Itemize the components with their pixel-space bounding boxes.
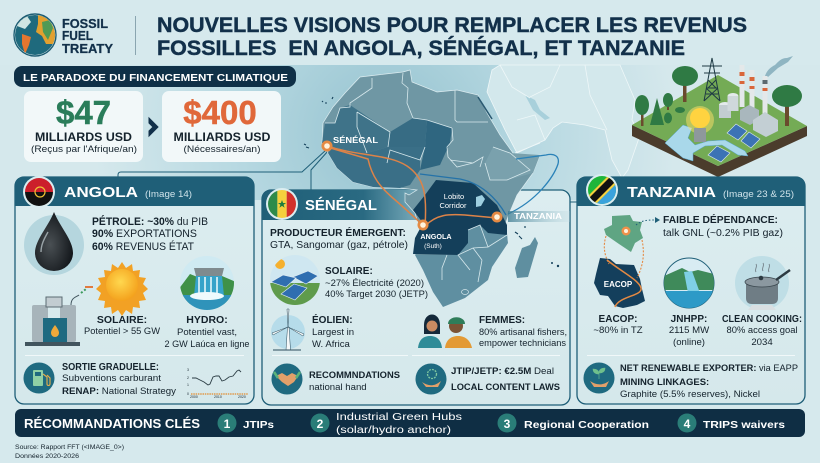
text: JTIP/JETP bbox=[451, 366, 560, 393]
text: EACOP: EACOP: bbox=[599, 314, 637, 325]
text: solaire: 40% Target 2030 (JETP) bbox=[325, 289, 428, 300]
icon: women bbox=[418, 314, 472, 348]
text: hydro: 2 GW Laúca en ligne bbox=[164, 339, 250, 350]
heading: Tanzania: TANZANIA bbox=[627, 184, 716, 201]
text: solaire: SOLAIRE: bbox=[97, 314, 147, 326]
recommendation 3: 3 bbox=[504, 417, 511, 431]
text: clean cooking: CLEAN COOKING: bbox=[722, 314, 802, 325]
text: clean cooking: 2034 bbox=[751, 337, 773, 348]
text: solaire: Potentiel > 55 GW bbox=[84, 326, 161, 337]
smoke bbox=[765, 56, 793, 77]
icon: handshake bbox=[272, 364, 302, 394]
text: clean cooking: 80% access goal bbox=[726, 325, 798, 336]
text: éolien: Largest in bbox=[312, 327, 354, 338]
title: NOUVELLES VISIONS POUR REMPLACER LES REVENUS bbox=[157, 14, 747, 37]
panel: Sénégal bbox=[262, 190, 570, 405]
text: producteur émergent: GTA, Sangomar (gaz, pétrole) bbox=[270, 240, 408, 251]
text: sortie graduelle: Subventions carburant bbox=[62, 373, 161, 384]
panel: Tanzania bbox=[577, 174, 805, 404]
logo: Fossil Fuel Treaty bbox=[14, 14, 56, 56]
map label: Lobito Corridor: Lobito bbox=[444, 192, 464, 201]
chimneys and factory bbox=[719, 65, 778, 137]
map: central corridor dark region bbox=[413, 180, 507, 255]
map label: Angola: (Suth) bbox=[424, 243, 442, 250]
heading: Sénégal: SÉNÉGAL bbox=[305, 197, 377, 214]
card: $47: $47 bbox=[56, 94, 111, 131]
text: JNHPP: 2115 MW bbox=[669, 325, 710, 336]
map label: Lobito Corridor: Corridor bbox=[439, 201, 467, 210]
logo wordmark: FOSSIL bbox=[62, 17, 108, 31]
map label: Angola bbox=[420, 232, 452, 250]
recommendations bar bbox=[15, 409, 805, 437]
icon: hydro dam bbox=[180, 256, 234, 310]
card: $400: $400 bbox=[183, 94, 257, 131]
panel: Sénégal content bbox=[266, 188, 567, 394]
icon: Tanzania flag bbox=[586, 174, 618, 206]
recommendation 2: Industrial Green Hubs bbox=[336, 411, 462, 423]
source note bbox=[15, 444, 124, 460]
map: Chad bbox=[420, 120, 452, 170]
map: Ethiopia and Horn bbox=[485, 147, 540, 180]
recommendation 4 bbox=[678, 414, 785, 432]
text: hydro bbox=[164, 314, 250, 350]
water bbox=[665, 125, 748, 161]
map label: Tanzania bbox=[508, 211, 570, 222]
heading pill bbox=[14, 66, 296, 87]
map: Niger bbox=[388, 118, 427, 147]
recommendation 3: Regional Cooperation bbox=[524, 419, 649, 431]
soil bbox=[632, 125, 807, 177]
text: pétrole figures: 90% EXPORTATIONS bbox=[92, 228, 197, 240]
text: hydro: Potentiel vast, bbox=[177, 327, 237, 338]
panel: le paradoxe du financement climatique bbox=[14, 66, 296, 162]
text: JTIP/JETP: JTIP/JETP: €2.5M Deal bbox=[451, 366, 554, 377]
grass bbox=[632, 75, 807, 166]
icon: Tanzania map EACOP bbox=[594, 236, 645, 308]
text: éolien: ÉOLIEN: bbox=[312, 313, 353, 326]
trees bbox=[635, 66, 802, 126]
icon: clean cooking pot bbox=[735, 256, 790, 310]
map: blue shipping routes bbox=[508, 154, 558, 214]
recommendation 2: (solar/hydro anchor) bbox=[336, 425, 451, 436]
panel: Angola bbox=[15, 176, 254, 404]
map: Africa landmass bbox=[322, 70, 540, 307]
recommendation 1 bbox=[218, 414, 274, 432]
card: $47: (Reçus par l'Afrique/an) bbox=[31, 144, 137, 155]
text: femmes bbox=[479, 315, 567, 349]
recommendation 2 bbox=[310, 411, 462, 436]
text: solaire: ~27% Électricité (2020) bbox=[325, 278, 424, 289]
icon: oil tanks and pipeline bbox=[25, 287, 93, 346]
text: hydro: HYDRO: bbox=[186, 314, 228, 326]
text: net renewable exporter: MINING LINKAGES: bbox=[620, 377, 709, 388]
text: éolien bbox=[312, 313, 354, 350]
icon: Kenya-Uganda map with pin bbox=[604, 215, 643, 252]
line chart: 2010 bbox=[214, 395, 222, 399]
text: femmes: 80% artisanal fishers, bbox=[479, 327, 567, 338]
icon: oil drop bbox=[24, 212, 84, 275]
text: solaire bbox=[84, 314, 161, 337]
map: Lake Victoria bbox=[476, 195, 485, 207]
text: solaire: SOLAIRE: bbox=[325, 266, 373, 277]
recommendation 4: 4 bbox=[684, 417, 691, 431]
logo wordmark: TREATY bbox=[62, 42, 114, 56]
text: JTIP/JETP: LOCAL CONTENT LAWS bbox=[451, 382, 560, 393]
text: sortie graduelle bbox=[62, 362, 176, 397]
map: southern Africa bbox=[415, 225, 508, 307]
text: sortie graduelle: SORTIE GRADUELLE: bbox=[62, 362, 159, 373]
text: faible dépendance: FAIBLE DÉPENDANCE: bbox=[663, 213, 778, 226]
pylon bbox=[702, 58, 722, 101]
text: net renewable exporter: NET RENEWABLE EXPORTER: via EAPP bbox=[620, 363, 798, 374]
text: JNHPP: JNHPP: bbox=[671, 314, 707, 325]
source note: Données 2020-2026 bbox=[15, 453, 79, 460]
icon: solar field bbox=[270, 255, 320, 305]
recommendation 1: 1 bbox=[224, 417, 231, 431]
text: pétrole figures: 60% REVENUS ÉTAT bbox=[92, 240, 195, 253]
text: EACOP bbox=[593, 314, 643, 336]
icon: JNHPP waterfall bbox=[664, 258, 714, 309]
image reference: (Image 14) bbox=[145, 189, 192, 200]
text: producteur émergent: PRODUCTEUR ÉMERGENT: bbox=[270, 226, 406, 239]
title: FOSSILLES EN ANGOLA, SÉNÉGAL, ET TANZANIE bbox=[157, 37, 685, 60]
line chart: 1 bbox=[187, 383, 189, 387]
text: EACOP: ~80% in TZ bbox=[593, 325, 643, 336]
text: sortie graduelle: RENAP: National Strategy bbox=[62, 386, 176, 397]
map label: Angola: ANGOLA bbox=[420, 232, 452, 241]
connector lines from map to panels bbox=[118, 150, 577, 214]
text: net renewable exporter: Graphite (5.5% reserves), Nickel bbox=[620, 389, 760, 400]
card: $400 bbox=[162, 91, 281, 162]
recommendation 3 bbox=[498, 414, 649, 432]
arrow: dotted to faible dépendance bbox=[636, 217, 660, 225]
text: net renewable exporter bbox=[620, 363, 798, 400]
arrow: chevron bbox=[149, 118, 158, 136]
map: route nodes bbox=[322, 140, 502, 230]
icon: Tanzania map EACOP: EACOP bbox=[604, 280, 633, 289]
text: éolien: W. Africa bbox=[312, 339, 351, 350]
image reference: (Image 23 & 25) bbox=[723, 189, 794, 200]
heading: Angola: ANGOLA bbox=[64, 184, 138, 201]
map label: Tanzania: TANZANIA bbox=[514, 212, 562, 221]
map: West African coast bbox=[328, 147, 425, 188]
light bulb bbox=[686, 106, 714, 142]
card: $400: (Nécessaires/an) bbox=[184, 144, 260, 155]
line chart: 2020 bbox=[238, 395, 246, 399]
text: solaire bbox=[325, 266, 428, 300]
recommendation 2: 2 bbox=[317, 417, 324, 431]
icon: wind turbine bbox=[271, 309, 305, 350]
text: JNHPP: (online) bbox=[673, 337, 705, 348]
text: recommandations: national hand bbox=[309, 382, 367, 393]
card: $47 bbox=[24, 91, 143, 162]
recommendation 4: TRIPS waivers bbox=[703, 419, 785, 431]
icon: hand with leaf bbox=[416, 364, 446, 394]
line chart: 2000 bbox=[190, 395, 198, 399]
text: producteur émergent bbox=[270, 226, 408, 251]
card: $47: MILLIARDS USD bbox=[35, 132, 132, 144]
line chart: 3 bbox=[187, 368, 189, 372]
map: Mauritania and Mali bbox=[322, 105, 390, 153]
card: $400: MILLIARDS USD bbox=[174, 132, 270, 144]
text: faible dépendance: talk GNL (~0.2% PIB gaz) bbox=[663, 228, 783, 239]
icon: sun bbox=[96, 262, 148, 316]
map of Africa bbox=[304, 65, 640, 307]
icon: fuel pump bbox=[24, 362, 54, 394]
line chart bbox=[187, 368, 248, 399]
logo wordmark: FUEL bbox=[62, 29, 93, 43]
map: internal borders bbox=[325, 73, 530, 282]
text: clean cooking bbox=[722, 314, 802, 348]
heading pill: LE PARADOXE DU FINANCEMENT CLIMATIQUE bbox=[23, 72, 288, 84]
text: femmes: FEMMES: bbox=[479, 315, 525, 326]
text: recommandations: RECOMMNDATIONS bbox=[309, 370, 400, 381]
map: orange routes bbox=[327, 146, 497, 226]
isometric green energy illustration bbox=[632, 56, 807, 177]
map label: Sénégal: SÉNÉGAL bbox=[333, 136, 378, 145]
icon: Angola flag bbox=[23, 176, 55, 208]
text: pétrole figures: PÉTROLE: ~30% du PIB bbox=[92, 215, 208, 228]
text: recommandations bbox=[309, 370, 400, 393]
line chart: 0 bbox=[187, 392, 189, 396]
recommendation 1: JTIPs bbox=[243, 419, 274, 431]
text: JNHPP bbox=[669, 314, 710, 348]
text: faible dépendance bbox=[663, 213, 783, 239]
text: femmes: empower technicians bbox=[479, 338, 566, 349]
icon: hand with seedling bbox=[584, 362, 614, 394]
source note: Source: Rapport FFT (<IMAGE_0>) bbox=[15, 444, 124, 451]
line chart: 2 bbox=[187, 376, 189, 380]
map: Madagascar bbox=[515, 237, 538, 278]
solar panels bbox=[708, 124, 760, 162]
map label: Lobito Corridor bbox=[439, 192, 467, 210]
icon: Sénégal flag bbox=[266, 188, 298, 220]
map: Middle East and Asia outline bbox=[487, 65, 640, 178]
text: pétrole figures bbox=[92, 215, 208, 253]
bar heading: RÉCOMMANDATIONS CLÉS bbox=[24, 416, 200, 431]
logo wordmark bbox=[62, 17, 114, 56]
title bbox=[157, 14, 747, 60]
